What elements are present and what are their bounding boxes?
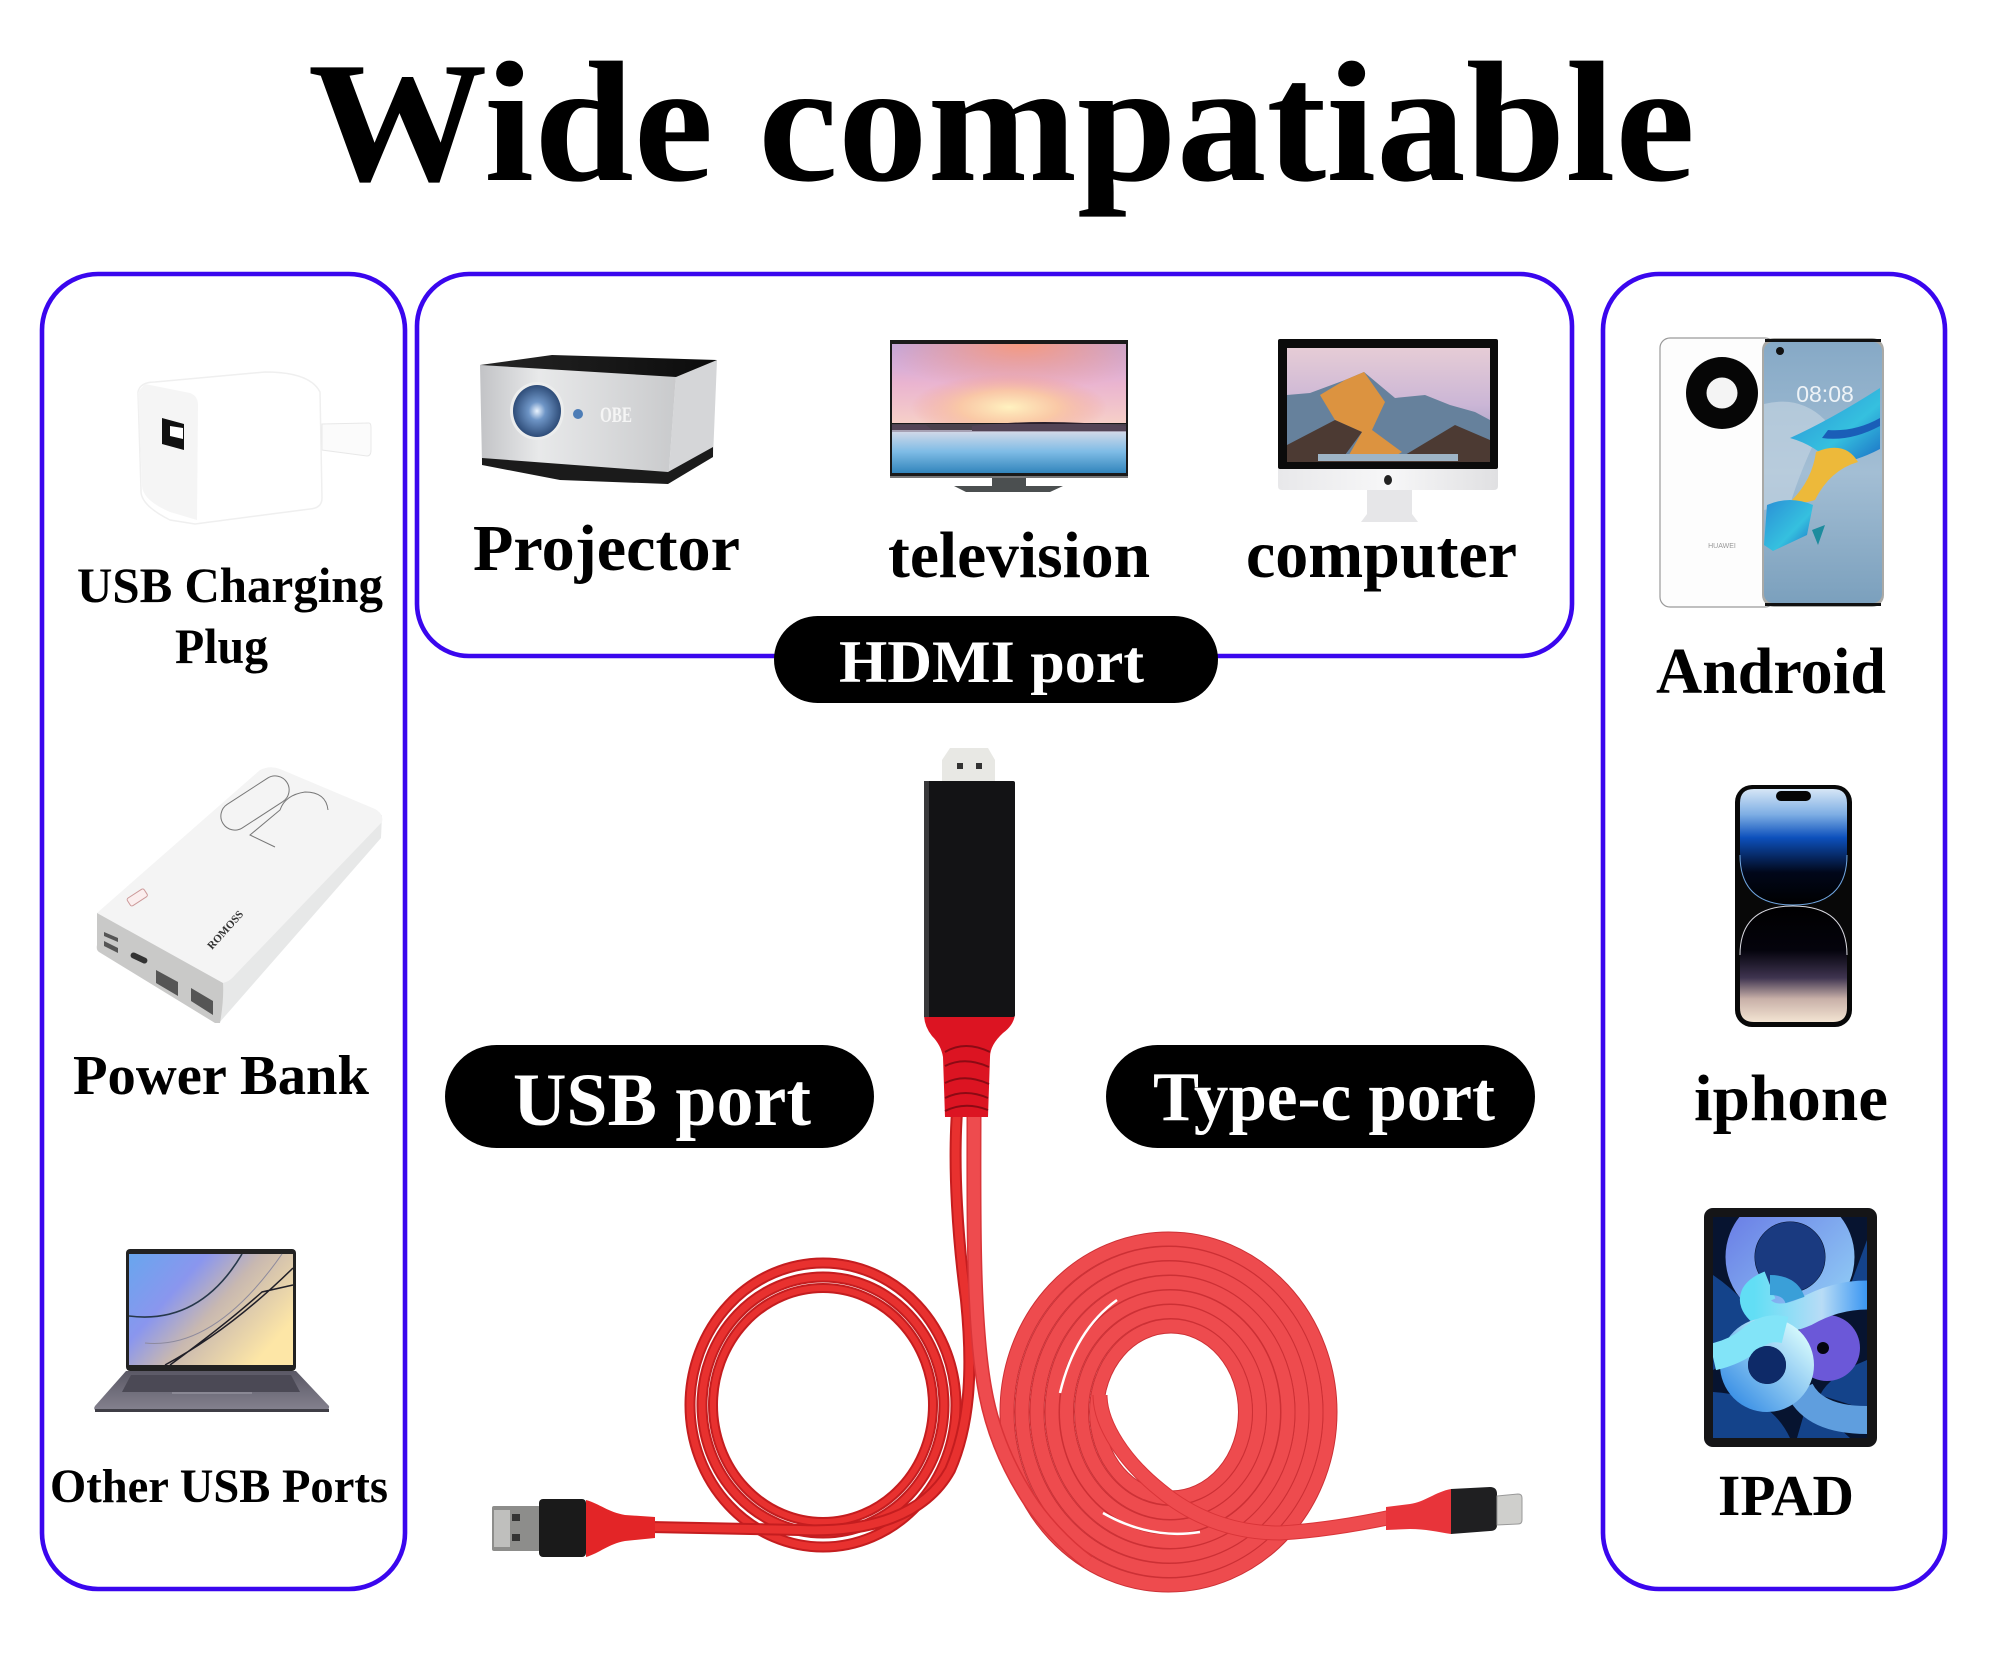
panel: USB power sources (42, 274, 405, 1589)
icon: projector: OBE (600, 402, 632, 427)
title: Wide compatiable (308, 28, 1695, 218)
label: Power Bank: Power Bank (73, 1045, 370, 1107)
icon: power bank: ROMOSS (205, 909, 246, 952)
coil: Type-C cable loops (1007, 1239, 1330, 1585)
pill: USB port: USB port (513, 1059, 811, 1142)
icon: computer (1278, 339, 1498, 522)
label: Other USB Ports: Other USB Ports (50, 1460, 388, 1513)
label: Projector: Projector (473, 512, 740, 585)
panel: mobile devices (1603, 274, 1945, 1589)
icon: laptop (94, 1249, 329, 1412)
coil: USB cable loops (690, 1263, 956, 1547)
HDMI adapter (924, 748, 1015, 1117)
Type-C cable strand (974, 1112, 1392, 1562)
icon: projector (480, 355, 717, 484)
icon: iPhone (1735, 785, 1852, 1027)
USB cable strand (650, 1112, 969, 1530)
icon: Android phone: 08:08 (1796, 381, 1854, 407)
pill: Type-c port (1106, 1045, 1535, 1148)
label: IPAD: IPAD (1718, 1463, 1854, 1528)
USB-A connector (492, 1499, 655, 1557)
label: iphone: iphone (1694, 1062, 1888, 1135)
icon: television (890, 340, 1128, 492)
HDMI-USB-Type-C cable (492, 748, 1522, 1585)
label: computer: computer (1246, 516, 1517, 592)
pill: USB port (445, 1045, 874, 1148)
pill: Type-c port: Type-c port (1153, 1059, 1495, 1136)
label: USB Charging Plug: Plug (175, 618, 268, 674)
icon: iPad (1704, 1207, 1877, 1447)
icon: Android phone: HUAWEI (1708, 543, 1736, 550)
label: television: television (888, 519, 1150, 592)
pill: HDMI port: HDMI port (839, 629, 1144, 695)
panel: HDMI devices (417, 274, 1572, 703)
label: USB Charging Plug: USB Charging (77, 557, 383, 613)
icon: USB charging plug (138, 372, 371, 524)
label: Android: Android (1656, 635, 1886, 708)
pill: HDMI port (774, 616, 1218, 703)
USB-C connector (1386, 1487, 1522, 1534)
icon: Android phone (1660, 338, 1884, 607)
label: USB Charging Plug (77, 557, 383, 674)
icon: power bank (97, 767, 382, 1023)
